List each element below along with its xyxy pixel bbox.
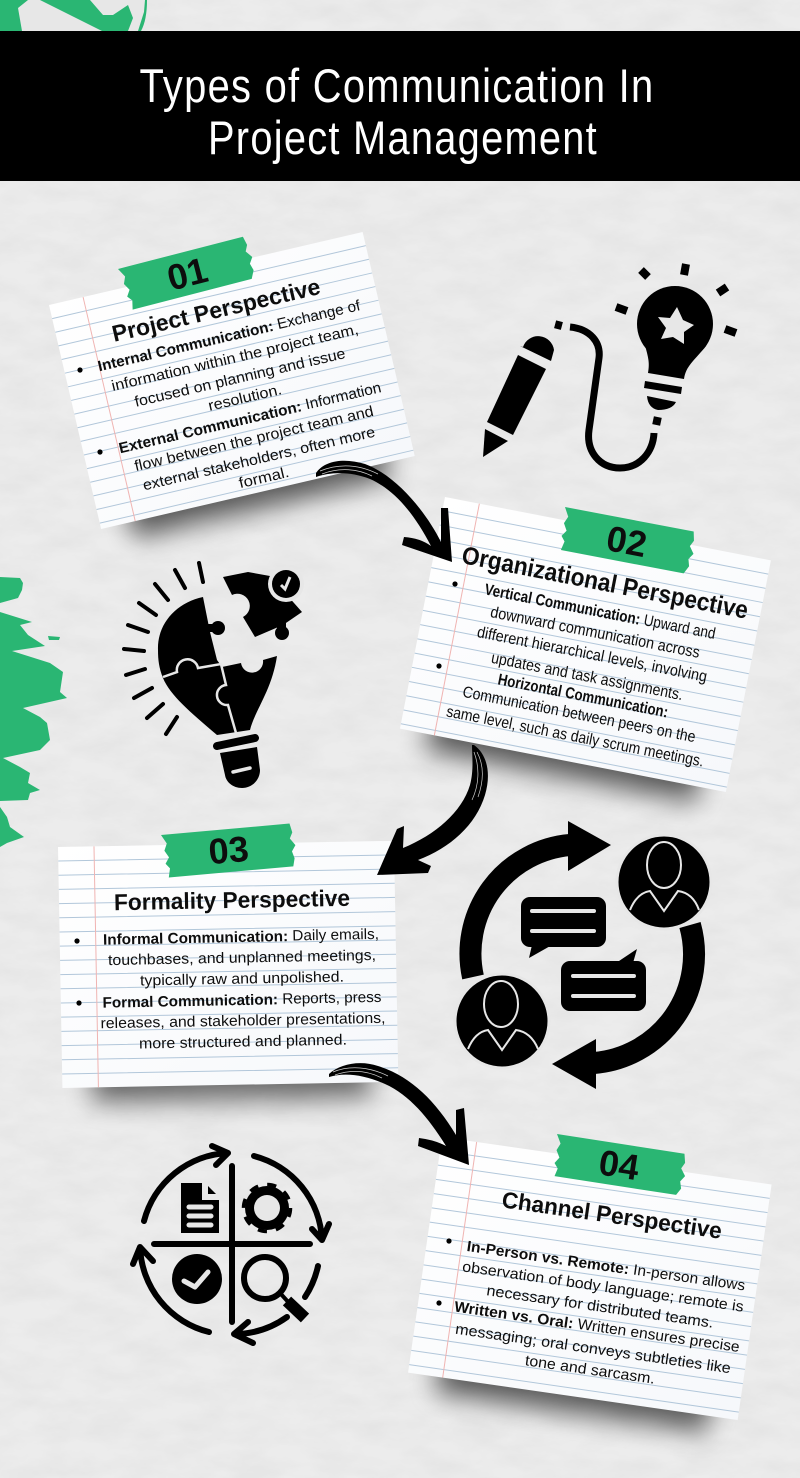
top arrow (470, 821, 611, 977)
number tape 04 (551, 1134, 688, 1196)
panel 4 text: observation of body language; remote is (461, 1258, 745, 1316)
panel 4 text: Written vs. Oral: Written ensures precise (453, 1298, 741, 1356)
bottom arrow (552, 925, 694, 1089)
icon: communication cycle (455, 821, 711, 1089)
panel 1 text: Internal Communication: Exchange of (96, 297, 363, 375)
rays (124, 563, 203, 734)
panel 2 text: Organizational Perspective (460, 541, 751, 625)
number tape 02 (557, 507, 698, 575)
document (181, 1183, 219, 1233)
panel 2: organizational perspective (397, 497, 771, 808)
panel 4: channel perspective (406, 1134, 772, 1436)
panel 1: project perspective (49, 232, 418, 545)
cable (554, 320, 662, 468)
arrow: card 1 to card 2 (316, 461, 452, 562)
green brush stroke left (0, 577, 67, 847)
person bottom left (455, 974, 549, 1068)
pencil (483, 336, 554, 457)
panel 3 text: typically raw and unpolished. (140, 969, 344, 989)
decorative green shape top left (0, 0, 147, 31)
panel 3: formality perspective (58, 823, 399, 1103)
bulb (637, 286, 713, 410)
panel 1 text: External Communication: Information (117, 379, 383, 457)
check circle (172, 1254, 222, 1304)
number tape 04: 04 (596, 1142, 642, 1188)
number tape 01 (118, 236, 258, 311)
bulb rays (616, 264, 736, 333)
title text: Types of Communication In (140, 59, 654, 112)
panel 4 text (436, 1186, 746, 1388)
person top right (617, 835, 711, 929)
panel 2 text: Horizontal Communication: (496, 671, 670, 721)
arrow: card 2 to card 3 (377, 745, 488, 875)
panel 2 text: different hierarchical levels, involving (476, 624, 708, 686)
cross (154, 1166, 310, 1322)
title bar (0, 31, 800, 181)
top right piece (223, 566, 304, 640)
panel 4 text: In-Person vs. Remote: In-person allows (466, 1238, 746, 1294)
panel 2 text: same level, such as daily scrum meetings. (445, 703, 705, 771)
bulb silhouette pieces (158, 597, 277, 735)
number tape 03: 03 (207, 828, 250, 872)
panel 1 text: external stakeholders, often more (141, 424, 377, 494)
circular arrows (133, 1146, 329, 1343)
paper 2 (397, 497, 771, 808)
panel 1 text: formal. (237, 464, 291, 492)
panel 2 text: Vertical Communication: Upward and (483, 581, 717, 643)
panel 3 text (74, 885, 386, 1052)
panel 4 text: Channel Perspective (500, 1186, 724, 1244)
panel 1 text (77, 273, 383, 494)
number tape 03 (161, 823, 297, 878)
panel 3 text: Formality Perspective (114, 885, 350, 915)
panel 4 text: tone and sarcasm. (524, 1352, 656, 1388)
panel 3 text: touchbases, and unplanned meetings, (108, 947, 376, 969)
panel 2 text: downward communication across (489, 604, 701, 662)
panel 1 text: information within the project team, (110, 321, 360, 395)
panel 1 text: resolution. (207, 381, 283, 415)
paper 4 (406, 1137, 772, 1436)
panel 2 text: updates and task assignments. (490, 650, 684, 704)
icon: pencil and light bulb (483, 264, 736, 468)
panel 2 text (436, 541, 751, 771)
panel 3 text: more structured and planned. (139, 1032, 347, 1052)
number tape 01: 01 (163, 249, 212, 299)
icon: puzzle light bulb (124, 563, 304, 788)
title text: Project Management (208, 111, 598, 164)
title text (140, 59, 654, 164)
panel 1 text: focused on planning and issue (133, 345, 347, 411)
panel 1 text: flow between the project team and (133, 403, 375, 475)
arrow: card 3 to card 4 (329, 1063, 469, 1165)
panel 2 text: Communication between peers on the (461, 684, 697, 746)
gear (244, 1184, 290, 1232)
chat bubble left (521, 897, 606, 958)
panel 1 text: Project Perspective (109, 273, 323, 347)
paper 3 (58, 841, 399, 1103)
panel 4 text: messaging; oral conveys subtleties like (454, 1321, 732, 1377)
panel 4 text: necessary for distributed teams. (485, 1282, 715, 1332)
icon: four quadrants cycle (133, 1146, 329, 1343)
number tape 02: 02 (603, 517, 650, 565)
bulb base (217, 738, 260, 788)
panel 3 text: releases, and stakeholder presentations, (100, 1010, 386, 1032)
magnifier (244, 1257, 305, 1318)
panel 3 text: Informal Communication: Daily emails, (103, 926, 379, 948)
chat bubble right (561, 949, 646, 1011)
panel 3 text: Formal Communication: Reports, press (102, 989, 382, 1011)
paper 1 (49, 232, 418, 545)
